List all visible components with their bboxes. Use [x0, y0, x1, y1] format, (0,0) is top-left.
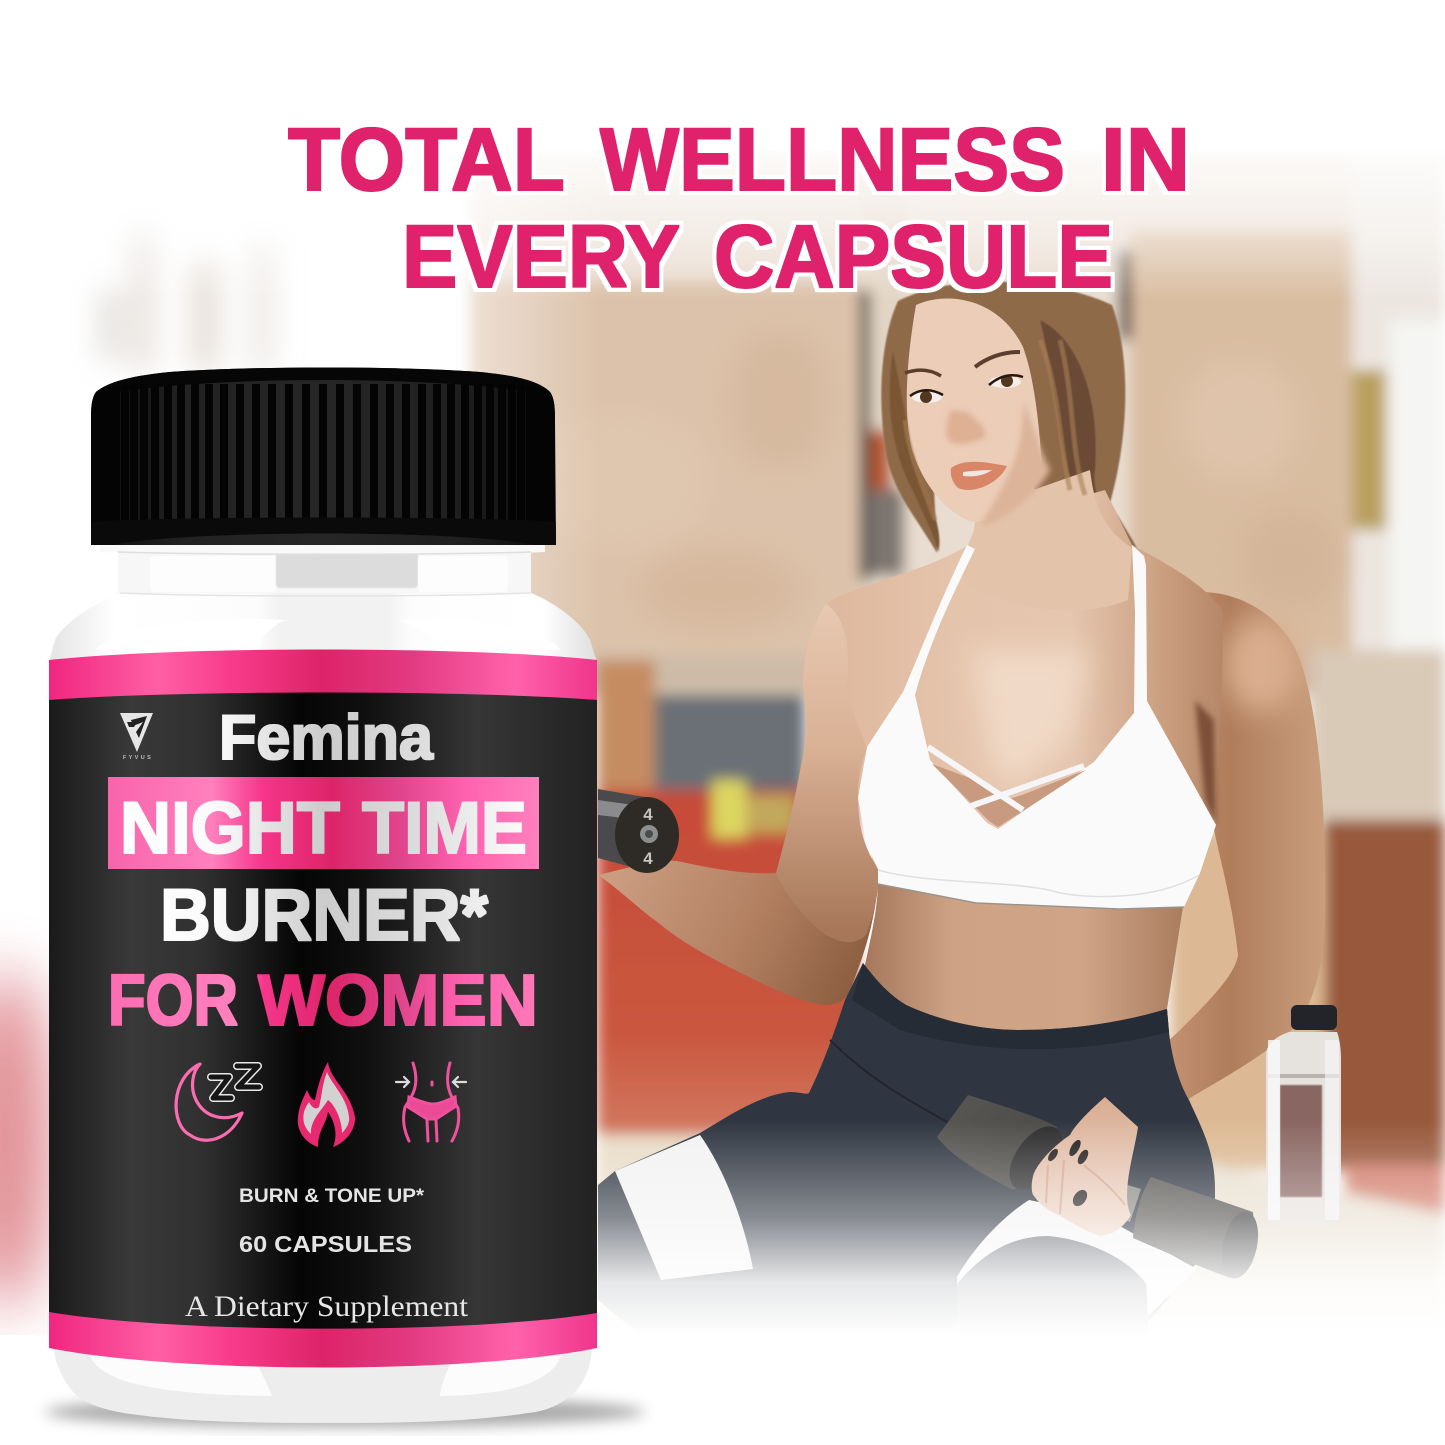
- title: EVERY: [402, 206, 680, 306]
- icon: moon and sleep: [176, 1064, 259, 1140]
- right arm (viewer side): [1170, 592, 1325, 1099]
- left forearm: [598, 850, 878, 1005]
- eyebrows: [905, 370, 941, 376]
- neck: [973, 470, 1132, 608]
- title: TOTAL: [288, 109, 565, 209]
- bottle shoulder: [49, 593, 597, 662]
- right shoulder highlight: [1224, 617, 1300, 713]
- wood mottling: [650, 342, 1283, 625]
- night time plate: TIME: [362, 788, 527, 869]
- nose: [947, 410, 986, 444]
- top fade: [470, 150, 1445, 292]
- title: [288, 109, 1190, 306]
- bottle neck: [100, 532, 545, 600]
- icon: waist: [396, 1063, 466, 1141]
- black cap: [91, 366, 556, 548]
- title: WELLNESS: [600, 109, 1065, 209]
- supplement note: A Dietary Supplement: [185, 1290, 469, 1323]
- white leg panel: [615, 1135, 753, 1280]
- left fade over photo: [464, 210, 573, 618]
- pink label band top: [49, 650, 597, 704]
- water bottle: [1266, 1005, 1341, 1225]
- claim text: BURN & TONE UP*: [239, 1186, 425, 1207]
- left pink floor wash: [0, 970, 55, 1310]
- brand logo: FYVUS: [123, 755, 153, 761]
- chest highlight: [970, 650, 1090, 790]
- eyes: [912, 391, 942, 403]
- supplement bottle: [45, 366, 645, 1427]
- bottle base: [53, 1345, 592, 1423]
- bottle shadow: [45, 1397, 645, 1427]
- burner: BURNER*: [160, 875, 489, 956]
- pink label band bottom: [49, 1305, 597, 1368]
- dumbbell right: [937, 1095, 1264, 1282]
- black label: [49, 692, 597, 1329]
- for women: WOMEN: [258, 961, 538, 1041]
- abdomen: [865, 884, 1183, 1030]
- bottom fade: [597, 1120, 1445, 1336]
- brand logo: [120, 713, 153, 761]
- dumbbell left: 4: [643, 849, 653, 868]
- for women: FOR: [108, 961, 238, 1041]
- night time plate: [108, 777, 539, 869]
- product name: Femina: [219, 703, 434, 773]
- loose hair strands: [905, 340, 1085, 520]
- torso upper: [826, 490, 1223, 907]
- white sports bra: [858, 545, 1216, 909]
- lips: [951, 462, 1007, 490]
- hair: [881, 282, 1137, 553]
- woman athlete: [597, 282, 1445, 1336]
- hand with nails: [1032, 1097, 1138, 1236]
- capsule count: 60 CAPSULES: [239, 1231, 412, 1257]
- for women: [108, 961, 538, 1041]
- dumbbell left: 4: [643, 805, 653, 824]
- armpit shadow: [1195, 700, 1216, 825]
- face: [905, 299, 1050, 526]
- dumbbell left: [598, 789, 679, 873]
- night time plate: NIGHT: [120, 788, 340, 869]
- left upper arm: [776, 604, 878, 942]
- title: CAPSULE: [714, 206, 1113, 306]
- title: IN: [1101, 109, 1190, 209]
- left faded window: [100, 230, 275, 370]
- icon: flame: [298, 1062, 355, 1147]
- black leggings: [598, 963, 1215, 1335]
- white knee panel: [957, 1200, 1194, 1315]
